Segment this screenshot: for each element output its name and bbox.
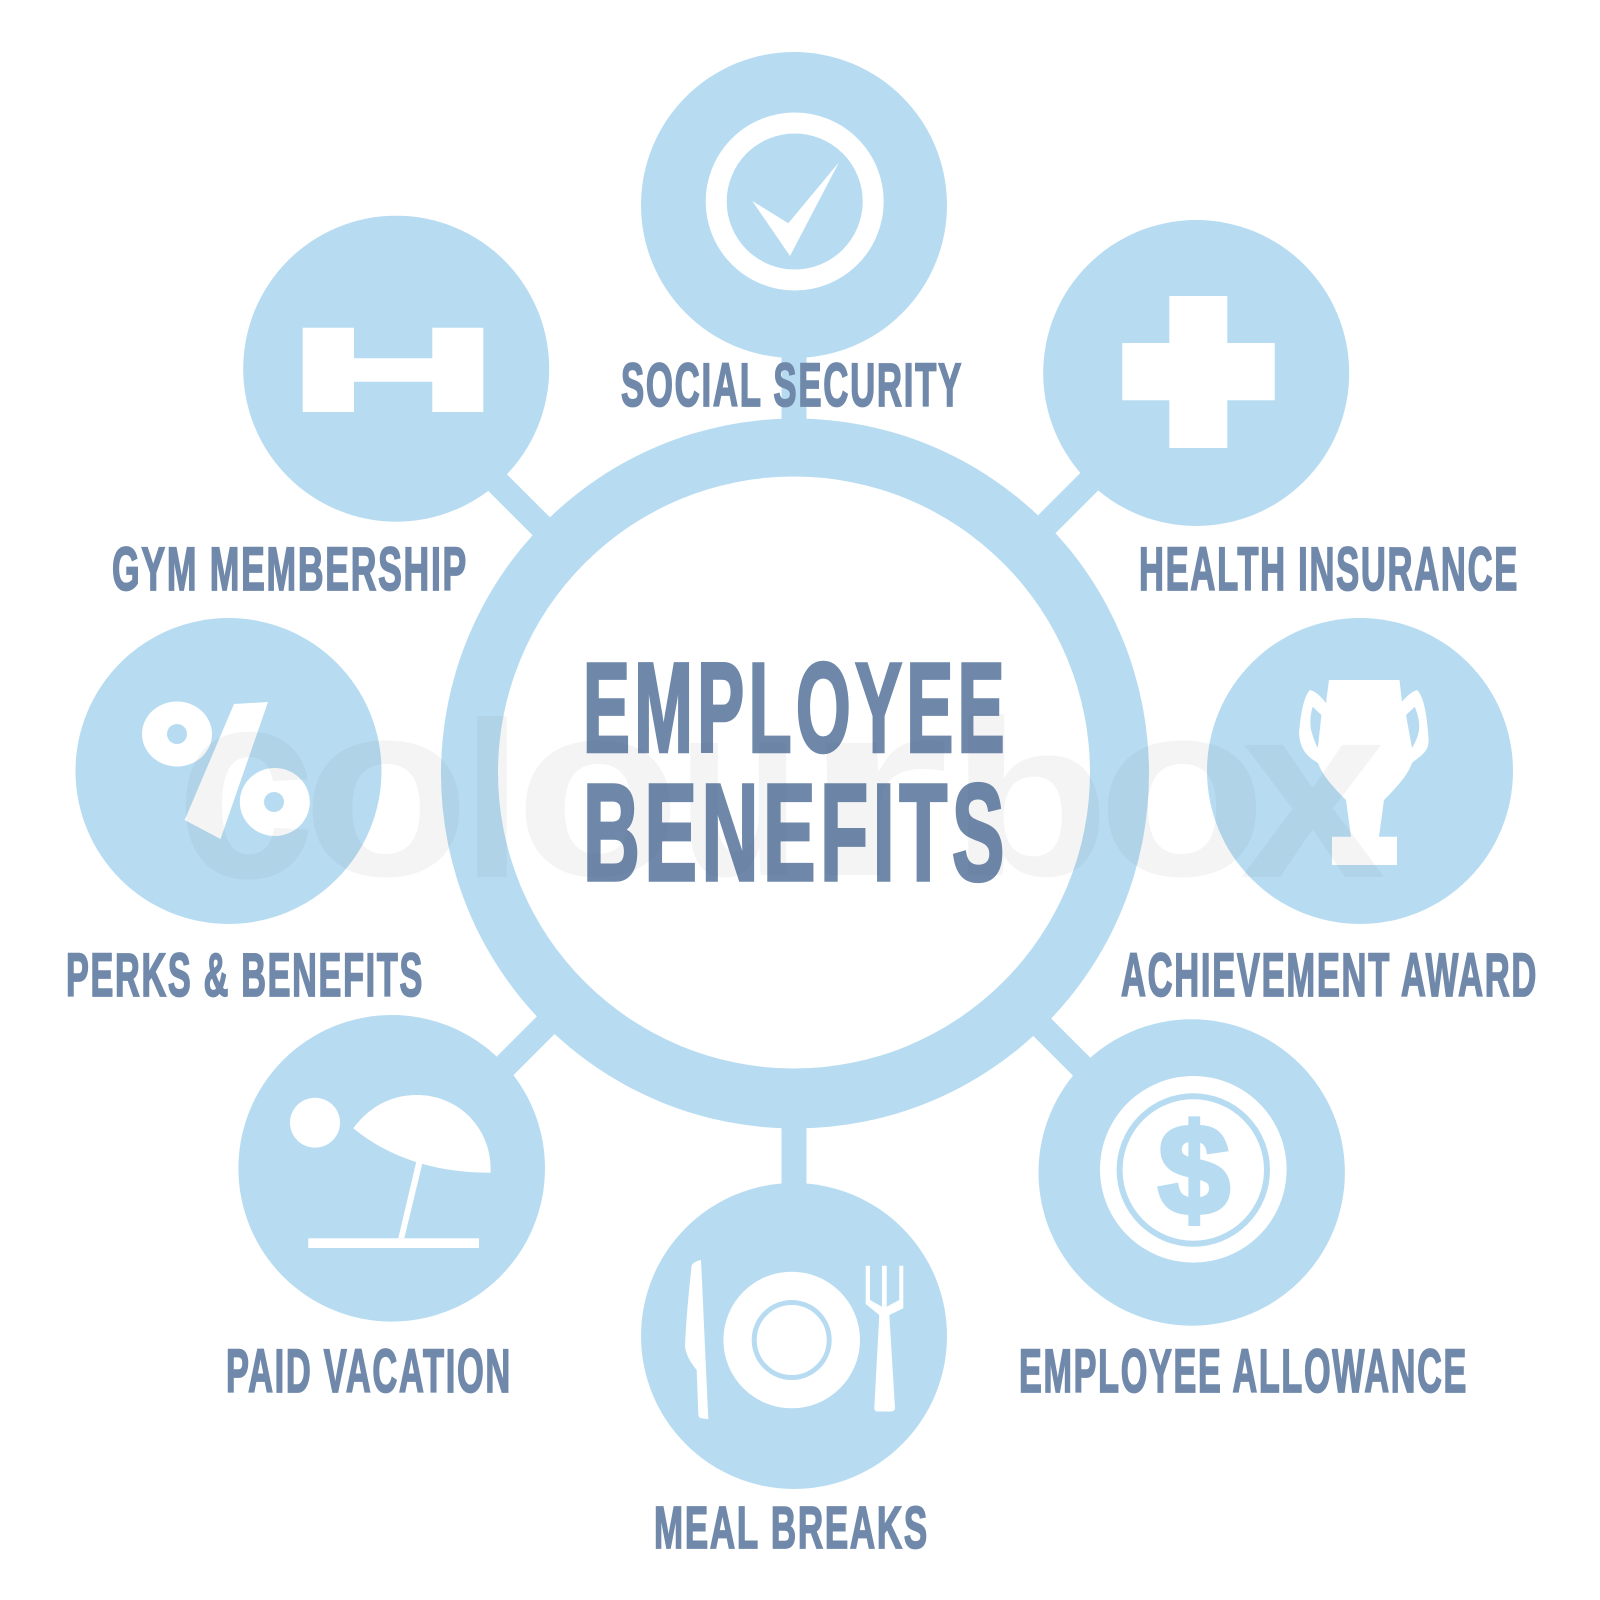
panel: employee allowance xyxy=(1038,1019,1345,1326)
title: BENEFITS xyxy=(583,756,1009,910)
watermark: l xyxy=(462,677,522,925)
label: perks and benefits: PERKS & BENEFITS xyxy=(66,941,424,1009)
panel: achievement award xyxy=(1207,618,1513,924)
title: EMPLOYEE xyxy=(583,636,1009,778)
watermark: o xyxy=(1097,649,1267,928)
icon: dumbbell xyxy=(303,328,483,412)
icon: check mark in ring xyxy=(716,123,873,280)
panel: paid vacation xyxy=(238,1015,545,1322)
panel: meal breaks xyxy=(641,1183,947,1489)
title xyxy=(583,636,1009,910)
panel: gym membership xyxy=(243,216,549,522)
label: meal breaks: MEAL BREAKS xyxy=(654,1495,929,1561)
central ring xyxy=(441,418,1149,1128)
panel: perks and benefits xyxy=(76,618,382,924)
watermark: b xyxy=(950,675,1110,923)
watermark: c xyxy=(176,634,316,935)
icon: trophy xyxy=(1299,680,1429,865)
connector spokes xyxy=(470,340,1120,1200)
icon: dollar coin xyxy=(1100,1076,1287,1263)
icon: beach umbrella and sun xyxy=(290,1095,491,1248)
icon: medical cross xyxy=(1122,296,1275,448)
watermark: x xyxy=(1240,651,1386,930)
watermark: u xyxy=(678,649,800,928)
panel: social security xyxy=(641,52,947,358)
panel: health insurance xyxy=(1043,220,1349,526)
icon: dollar coin: $ xyxy=(1158,1099,1230,1242)
watermark: o xyxy=(515,649,681,928)
icon: percent sign xyxy=(142,702,310,839)
watermark: r xyxy=(800,649,950,928)
watermark xyxy=(176,634,1386,935)
watermark: o xyxy=(302,649,470,928)
label: social security: SOCIAL SECURITY xyxy=(621,351,963,419)
label: gym membership: GYM MEMBERSHIP xyxy=(112,535,468,603)
label: paid vacation: PAID VACATION xyxy=(226,1337,512,1405)
icon: plate, knife and fork xyxy=(685,1260,903,1419)
